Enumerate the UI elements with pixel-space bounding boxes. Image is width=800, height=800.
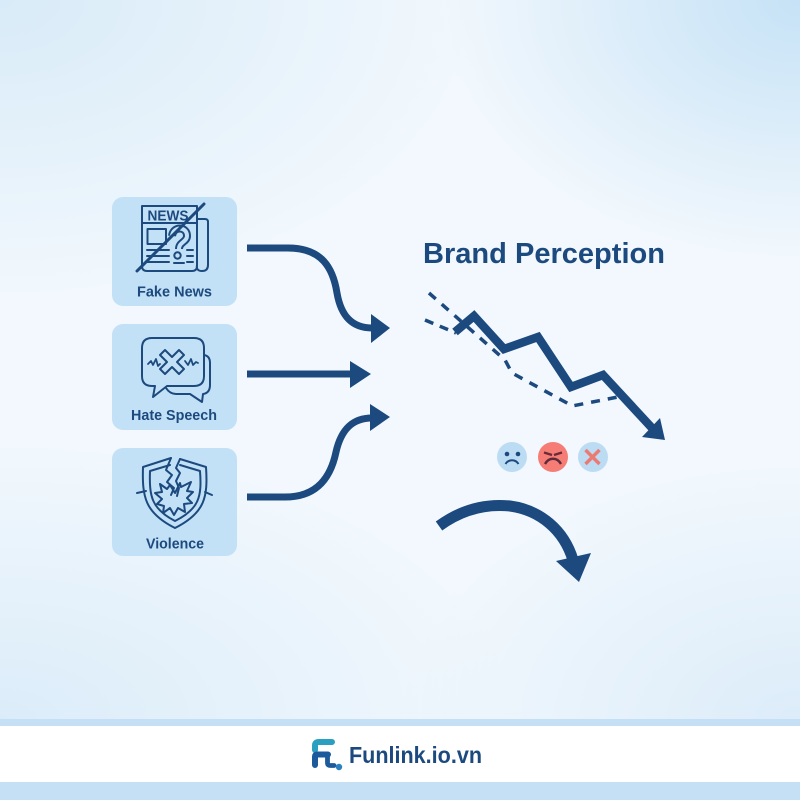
icon: cross badge (578, 442, 608, 472)
icon: crossed newspaper: NEWS (148, 208, 188, 224)
arrow: violence to perception (247, 404, 390, 497)
arrow: hate speech to perception (247, 361, 371, 388)
icon: speech bubbles (142, 338, 210, 402)
panel: hate speech (112, 324, 237, 430)
panel: fake news (112, 197, 237, 306)
panel: violence (112, 448, 237, 556)
solid declining line (455, 316, 652, 428)
label: hate speech: Hate Speech (131, 408, 217, 424)
label: violence: Violence (146, 536, 204, 552)
dashed line: upper trend (429, 293, 618, 406)
label: fake news: Fake News (137, 284, 212, 300)
arrow: fake news to perception (247, 248, 390, 343)
icon: angry face (538, 442, 568, 472)
brand name: Funlink.io.vn (349, 742, 482, 768)
arrow: curved downward (439, 505, 591, 582)
heading: Brand Perception (423, 238, 665, 270)
logo mark (315, 742, 342, 770)
arrowhead (642, 418, 665, 440)
icon: sad face (497, 442, 527, 472)
line chart: declining perception (425, 293, 665, 440)
dashed line: lower trend (425, 320, 456, 333)
icon: cracked shield (137, 458, 212, 528)
footer band (0, 719, 800, 800)
